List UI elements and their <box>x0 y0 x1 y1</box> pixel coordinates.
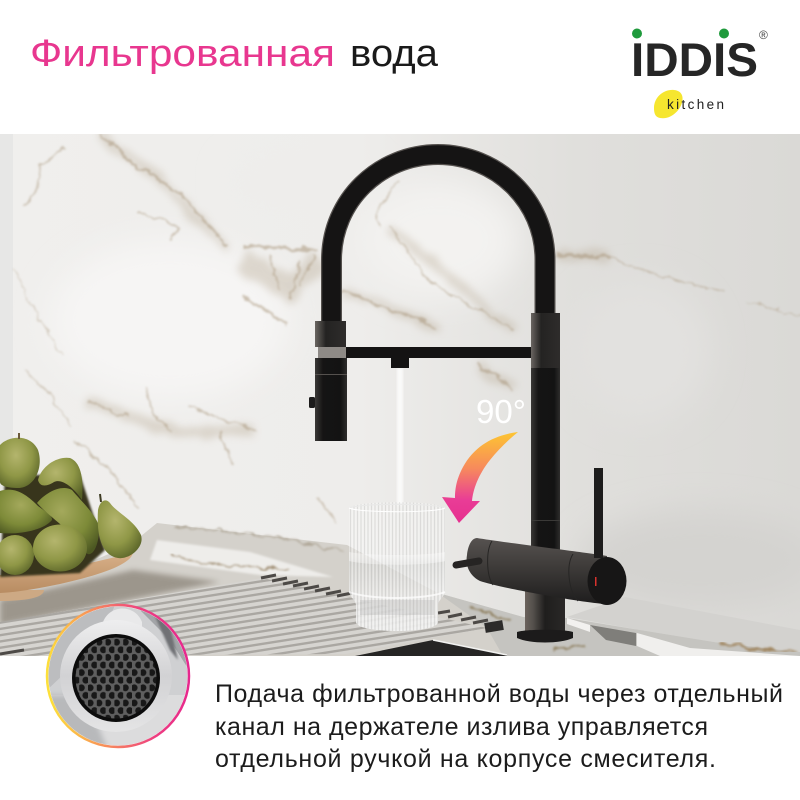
logo green dots <box>632 28 729 38</box>
magnifier: aerator detail <box>40 605 189 755</box>
glass <box>349 502 445 631</box>
pull-down sprayer <box>309 321 347 441</box>
description line 1: Подача фильтрованной воды через отдельный <box>215 680 783 708</box>
faucet <box>309 154 626 642</box>
faucet arch <box>332 154 545 325</box>
mixer body <box>467 538 607 604</box>
wooden bowl <box>0 553 133 601</box>
logo yellow blob <box>654 90 683 118</box>
honeycomb mesh <box>76 638 156 718</box>
logo kitchen: kitchen <box>667 97 724 112</box>
right counter surface <box>568 602 761 646</box>
pears <box>0 433 142 575</box>
logo wordmark: IDDIS <box>631 33 758 86</box>
marble wall <box>0 134 800 656</box>
title <box>30 33 439 75</box>
sink opening <box>355 640 507 656</box>
cross bar and outlet <box>346 347 534 368</box>
bowl of pears <box>0 433 142 601</box>
description line 2: канал на держателе излива управляется <box>215 713 708 741</box>
marble veins <box>13 134 800 523</box>
logo registered mark: ® <box>759 28 768 42</box>
dish rack <box>0 575 507 656</box>
fruit shadow <box>0 475 105 577</box>
countertop <box>0 523 800 656</box>
marble vein halos <box>87 134 610 431</box>
title black word: вода <box>350 33 439 75</box>
arrow: 90 degree turn <box>442 432 518 523</box>
gradient ring <box>47 605 189 747</box>
description line 3: отдельной ручкой на корпусе смесителя. <box>215 745 716 773</box>
title pink word: Фильтрованная <box>30 33 335 75</box>
photo: kitchen scene <box>0 134 800 656</box>
description text <box>215 680 783 773</box>
label: 90°: 90° <box>476 393 526 430</box>
body end cap <box>488 541 626 605</box>
logo: IDDIS kitchen <box>631 28 768 118</box>
faucet column <box>517 313 573 642</box>
filter handle <box>594 468 603 558</box>
water stream <box>397 368 403 505</box>
cold tap lever <box>456 561 479 565</box>
chrome aerator <box>48 606 188 746</box>
